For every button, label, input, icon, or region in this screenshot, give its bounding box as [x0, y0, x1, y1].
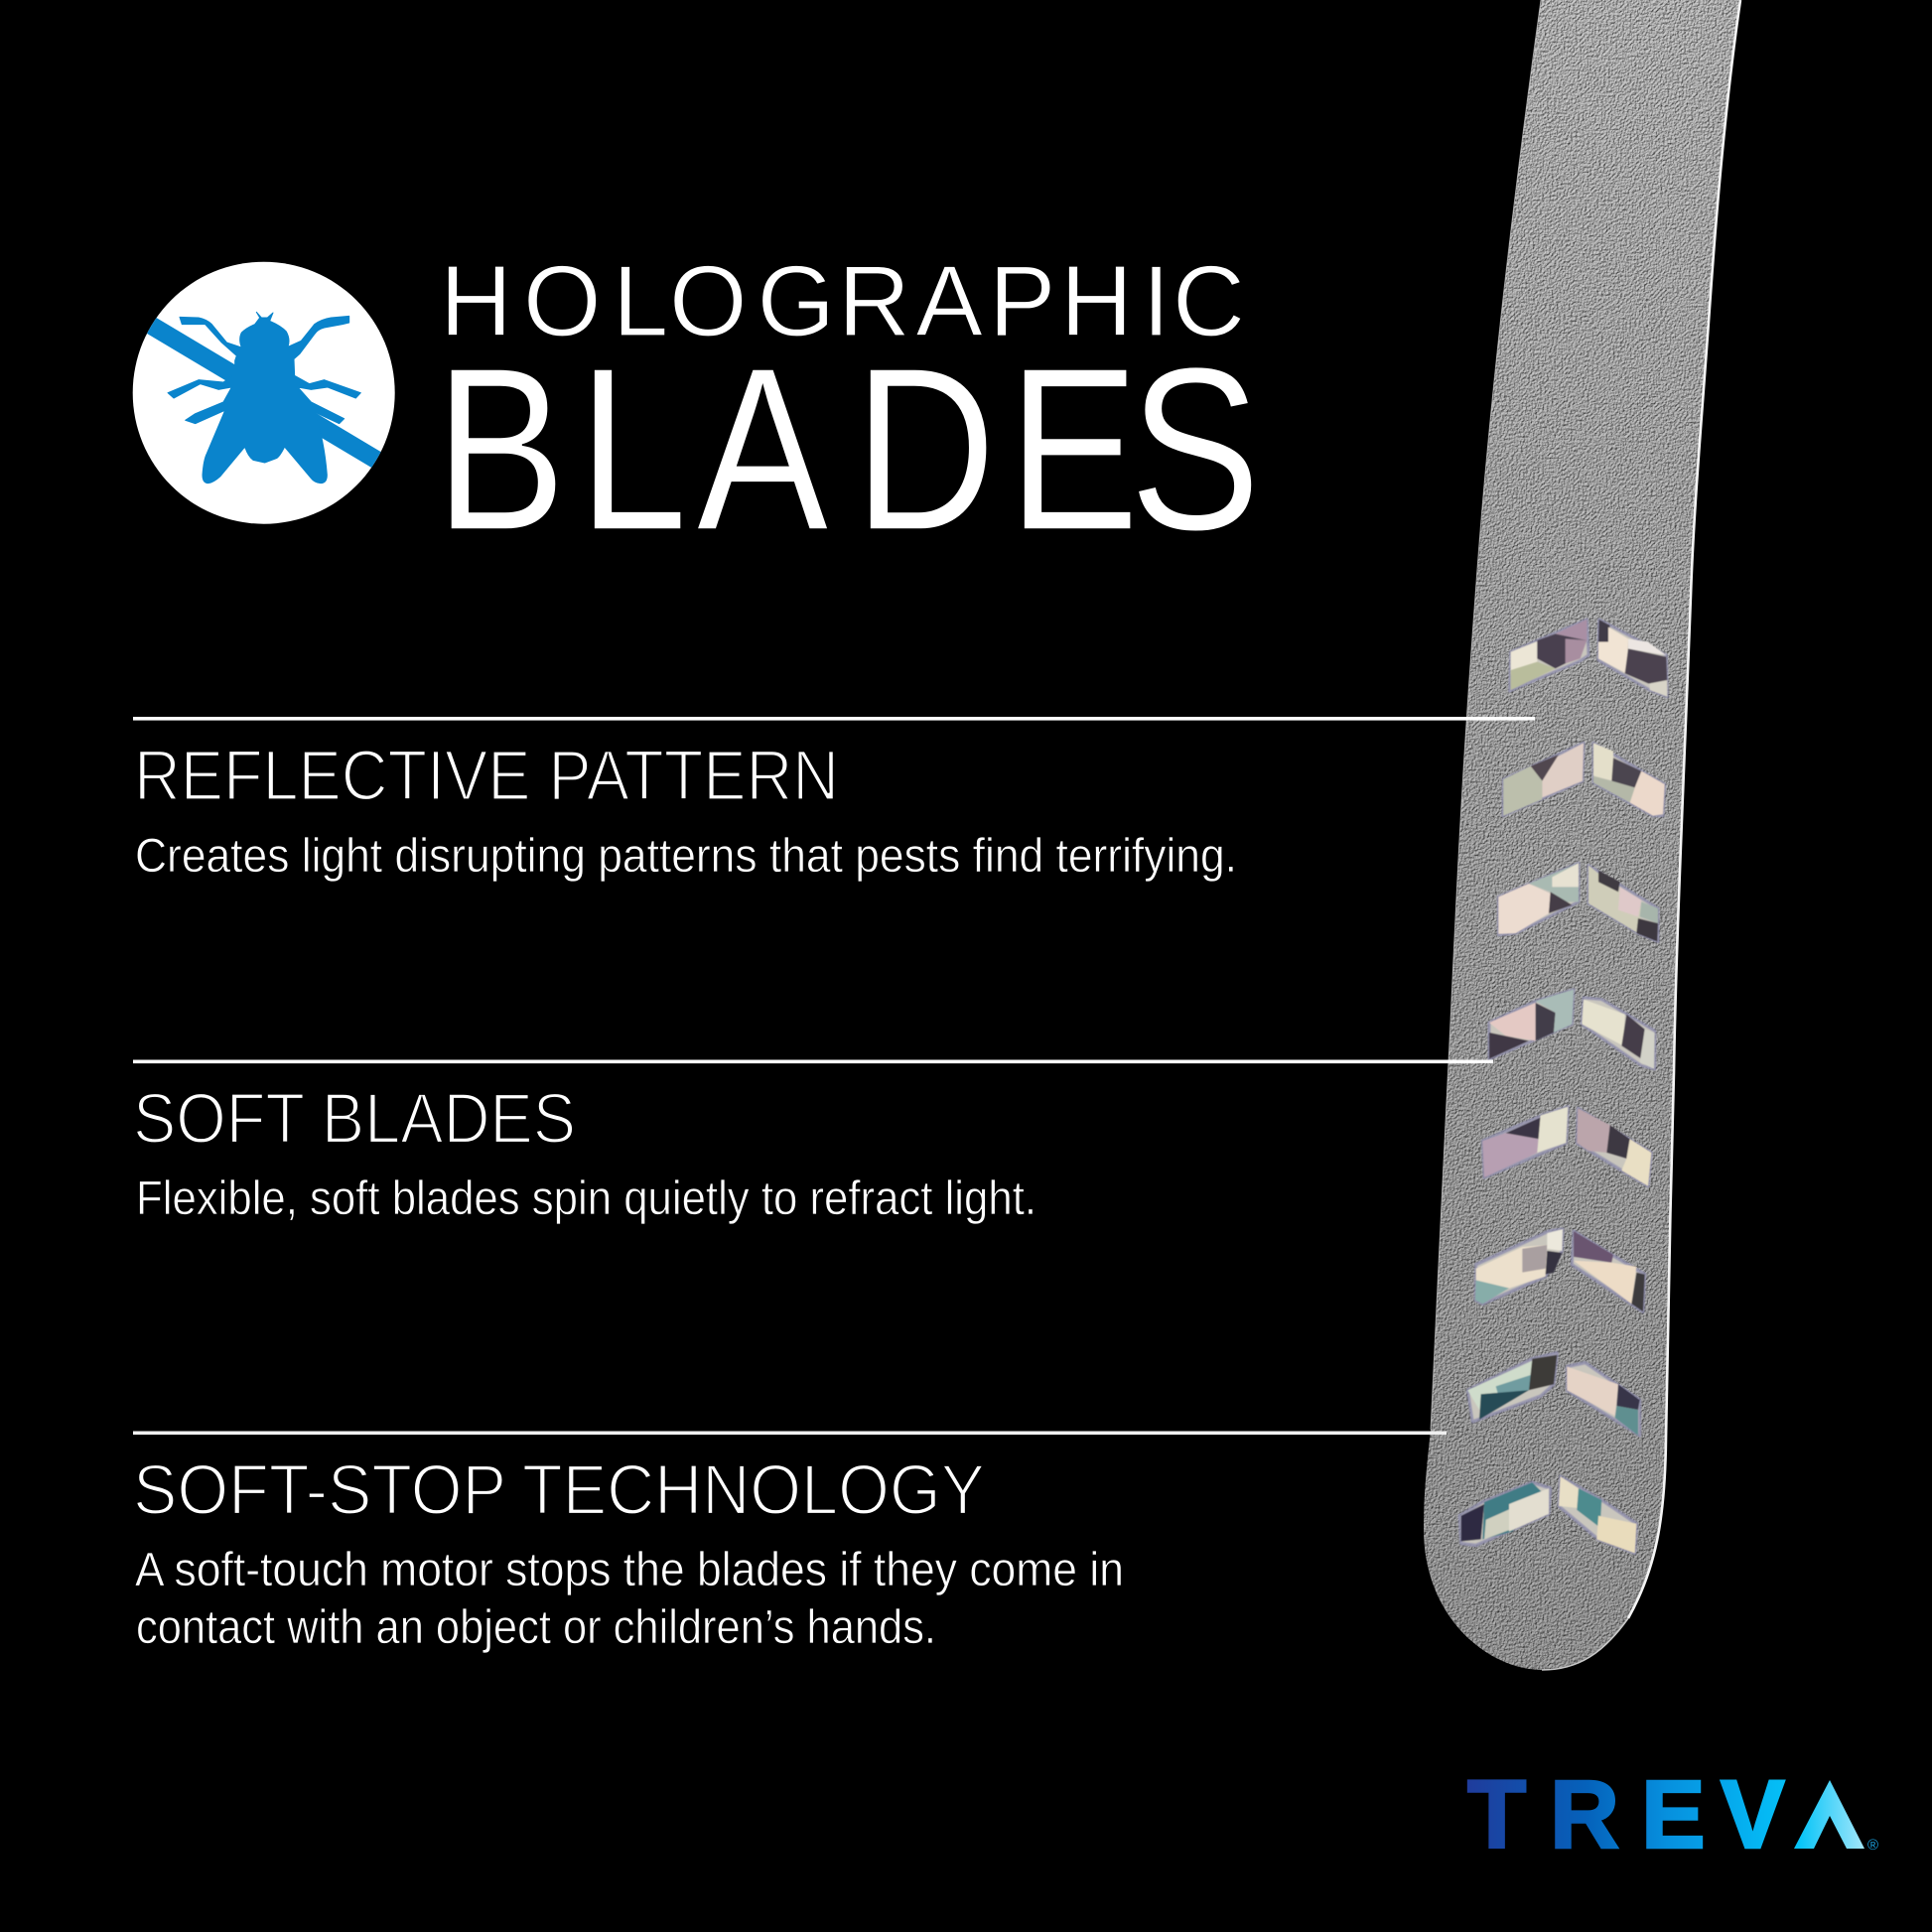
chevron row 3 left: [1498, 863, 1579, 935]
holographic chevrons rows 1-4: [1489, 620, 1667, 1069]
icon prohibition bar: [147, 318, 381, 468]
chevron row 7 left: [1467, 1353, 1557, 1422]
logo A chevron shape: [1794, 1780, 1864, 1849]
heading 2: SOFT BLADES: [133, 1080, 576, 1159]
chevron row 8 right: [1559, 1476, 1636, 1553]
logo: TREVA: [1467, 1779, 1878, 1851]
chevron row 5 right: [1577, 1108, 1651, 1186]
chevron row 6 right: [1572, 1231, 1645, 1311]
section: soft blades: [133, 1060, 1493, 1225]
title line 1: HOLOGRAPHIC: [440, 246, 1245, 357]
leader line 3: [133, 1432, 1447, 1435]
chevron row 2 right: [1593, 743, 1665, 816]
chevron row 4 left: [1489, 990, 1574, 1059]
section: soft-stop technology: [133, 1432, 1447, 1654]
blade right edge highlight: [1628, 0, 1740, 1618]
chevron row 1 left: [1510, 620, 1588, 691]
title: [435, 246, 1261, 580]
description 2: Flexible, soft blades spin quietly to refract light.: [136, 1173, 1036, 1225]
leader line 1: [133, 717, 1535, 721]
chevron row 1 right: [1598, 620, 1667, 697]
chevron row 5 left: [1482, 1107, 1568, 1177]
chevron row 8 left: [1459, 1482, 1551, 1545]
description 1: Creates light disrupting patterns that pests find terrifying.: [135, 830, 1237, 883]
blade: [1424, 0, 1740, 1670]
blade left edge highlight: [1431, 0, 1541, 1430]
leader line 2: [133, 1060, 1493, 1063]
logo registered mark: ®: [1867, 1837, 1878, 1854]
icon background circle: [133, 262, 395, 524]
title line 2: BLADES: [435, 320, 1261, 580]
section: reflective pattern: [133, 717, 1535, 883]
blade bottom edge highlight: [1542, 1618, 1628, 1670]
chevron row 2 left: [1503, 743, 1584, 816]
holographic chevrons rows 5-8: [1459, 1107, 1651, 1553]
icon fly silhouette: [168, 312, 360, 483]
chevron row 6 left: [1475, 1229, 1563, 1304]
description 3: A soft-touch motor stops the blades if they come in: [135, 1544, 1124, 1596]
blade body: [1424, 0, 1740, 1670]
heading 1: REFLECTIVE PATTERN: [134, 737, 839, 816]
description 3 line 2: contact with an object or children’s hands.: [136, 1601, 936, 1654]
heading 3: SOFT-STOP TECHNOLOGY: [133, 1451, 985, 1530]
icon: crossed-out fly: [133, 262, 395, 524]
chevron row 4 right: [1582, 998, 1655, 1069]
logo wordmark: TREVA: [1467, 1760, 1863, 1868]
chevron row 3 right: [1588, 866, 1658, 941]
chevron row 7 right: [1567, 1363, 1640, 1436]
